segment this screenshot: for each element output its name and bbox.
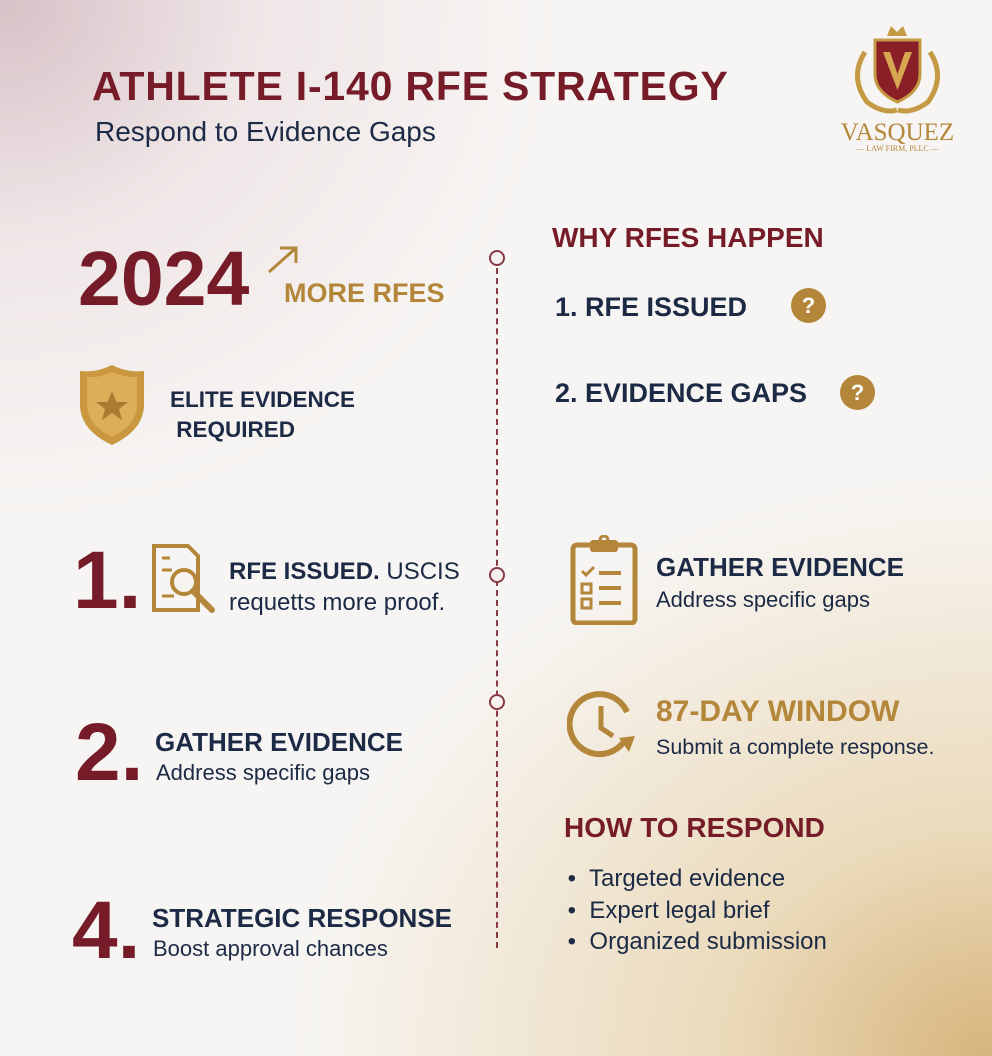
why rfes happen: ? (851, 380, 864, 405)
step 1 (73, 535, 460, 626)
why rfes happen: 2. EVIDENCE GAPS (555, 378, 807, 408)
why rfes happen: 1. RFE ISSUED (555, 292, 747, 322)
gather evidence right (570, 535, 904, 625)
why rfes happen: ? (802, 293, 815, 318)
subtitle: Respond to Evidence Gaps (95, 116, 436, 147)
logo (841, 26, 954, 153)
step 2: 2. (75, 707, 143, 798)
step 1: RFE ISSUED. USCIS (229, 558, 460, 585)
gather evidence right: GATHER EVIDENCE (656, 552, 904, 582)
step 1: requetts more proof. (229, 589, 445, 616)
step 2 (75, 707, 403, 798)
step 4: STRATEGIC RESPONSE (152, 903, 452, 933)
step 4: Boost approval chances (153, 936, 388, 961)
elite evidence: REQUIRED (176, 417, 295, 442)
how to respond (564, 812, 827, 955)
timeline (496, 258, 498, 948)
stat: 2024 more RFEs: 2024 (78, 236, 249, 322)
elite evidence (80, 365, 355, 445)
how to respond: • Expert legal brief (568, 896, 770, 924)
elite evidence: ELITE EVIDENCE (170, 387, 355, 412)
step 4: 4. (72, 885, 140, 976)
why rfes happen (552, 222, 875, 410)
step 2: Address specific gaps (156, 760, 370, 785)
why rfes happen: WHY RFES HAPPEN (552, 222, 824, 253)
87-day window: Submit a complete response. (656, 735, 934, 759)
how to respond: • Targeted evidence (568, 865, 785, 892)
87-day window (567, 691, 934, 759)
title: ATHLETE I-140 RFE STRATEGY (92, 63, 729, 109)
87-day window: 87-DAY WINDOW (656, 695, 899, 728)
gather evidence right: Address specific gaps (656, 587, 870, 612)
logo: VASQUEZ (841, 119, 954, 146)
stat: 2024 more RFEs: MORE RFES (284, 278, 445, 308)
how to respond: • Organized submission (568, 928, 827, 955)
stat: 2024 more RFEs (78, 236, 445, 322)
text: — LAW FIRM, PLLC — (856, 144, 939, 153)
step 4 (72, 885, 452, 976)
how to respond: HOW TO RESPOND (564, 812, 825, 843)
step 2: GATHER EVIDENCE (155, 727, 403, 757)
step 1: 1. (73, 535, 141, 626)
